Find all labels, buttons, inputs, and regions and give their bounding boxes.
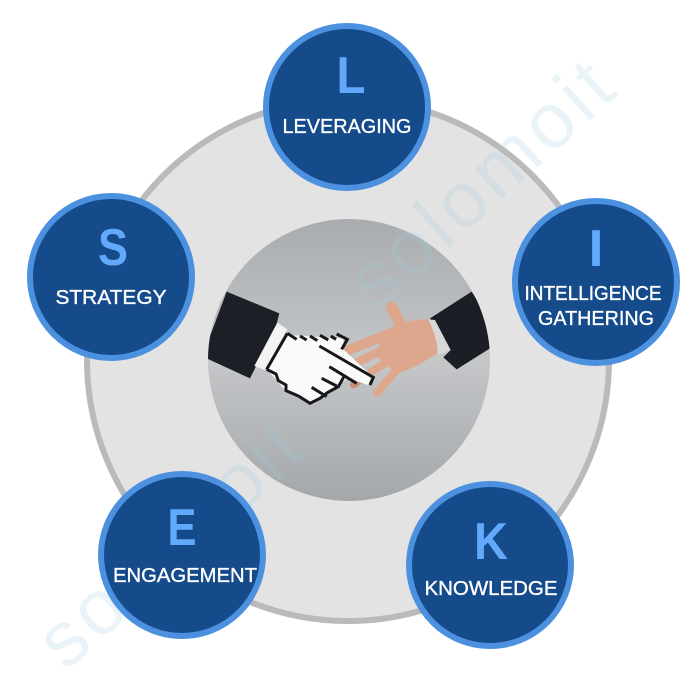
node: Strategy xyxy=(30,196,192,358)
node: Engagement: E xyxy=(168,499,196,557)
node: Strategy: S xyxy=(98,219,128,277)
node: Engagement: ENGAGEMENT xyxy=(113,564,257,587)
node: Leveraging xyxy=(266,26,428,188)
node: Intelligence Gathering: GATHERING xyxy=(538,307,654,330)
node: Knowledge: K xyxy=(474,513,508,571)
node: Intelligence Gathering: INTELLIGENCE xyxy=(524,282,662,305)
node: Intelligence Gathering: I xyxy=(588,220,604,278)
node: Engagement xyxy=(101,474,263,636)
node: Leveraging: L xyxy=(336,47,366,105)
node: Knowledge: KNOWLEDGE xyxy=(424,577,558,600)
central handshake image xyxy=(207,219,490,501)
watermark: bottom left: solomoit xyxy=(18,402,319,685)
watermark: top right: solomoit xyxy=(329,42,630,325)
outer ring panel xyxy=(87,99,609,621)
node: Intelligence Gathering xyxy=(515,201,677,363)
node: Knowledge xyxy=(409,484,571,646)
node: Leveraging: LEVERAGING xyxy=(282,115,412,138)
node: Strategy: STRATEGY xyxy=(56,286,167,309)
